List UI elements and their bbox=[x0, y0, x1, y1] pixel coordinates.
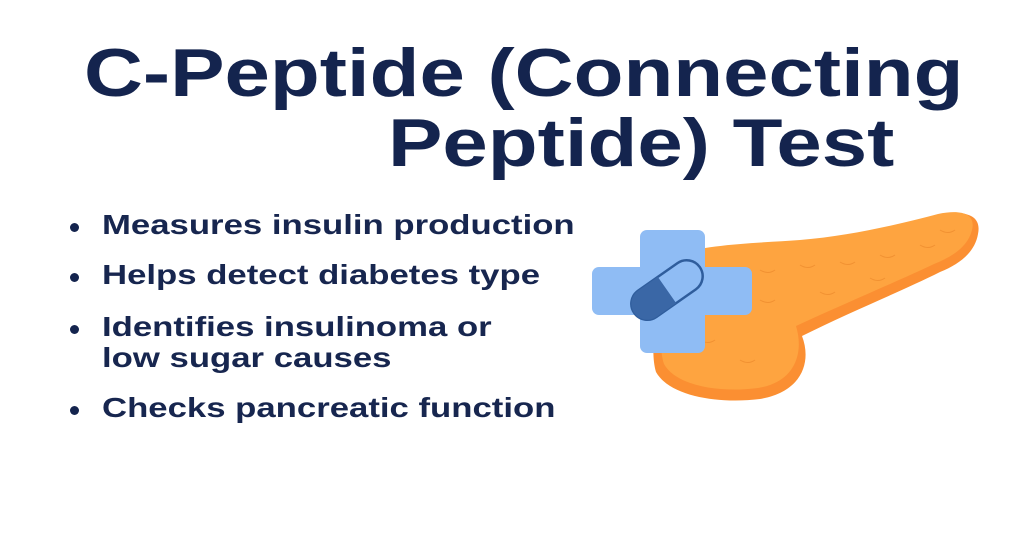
bullet 3: Identifies insulinoma or bbox=[102, 311, 492, 342]
title: Peptide) Test bbox=[388, 105, 894, 181]
pancreas bbox=[653, 212, 979, 401]
title: C-Peptide (Connecting bbox=[84, 35, 963, 111]
bullet 2: Helps detect diabetes type bbox=[102, 259, 540, 290]
title bbox=[84, 35, 963, 181]
bullet 3 bbox=[70, 311, 416, 373]
bullet 1: Measures insulin production bbox=[102, 209, 575, 240]
bullet 4: Checks pancreatic function bbox=[102, 392, 555, 423]
pill bbox=[625, 254, 709, 326]
bullet 3: low sugar causes bbox=[102, 342, 391, 373]
illustration: pancreas with medical cross and pill bbox=[592, 212, 979, 400]
medical cross bbox=[592, 230, 752, 353]
bullet list bbox=[70, 209, 575, 423]
